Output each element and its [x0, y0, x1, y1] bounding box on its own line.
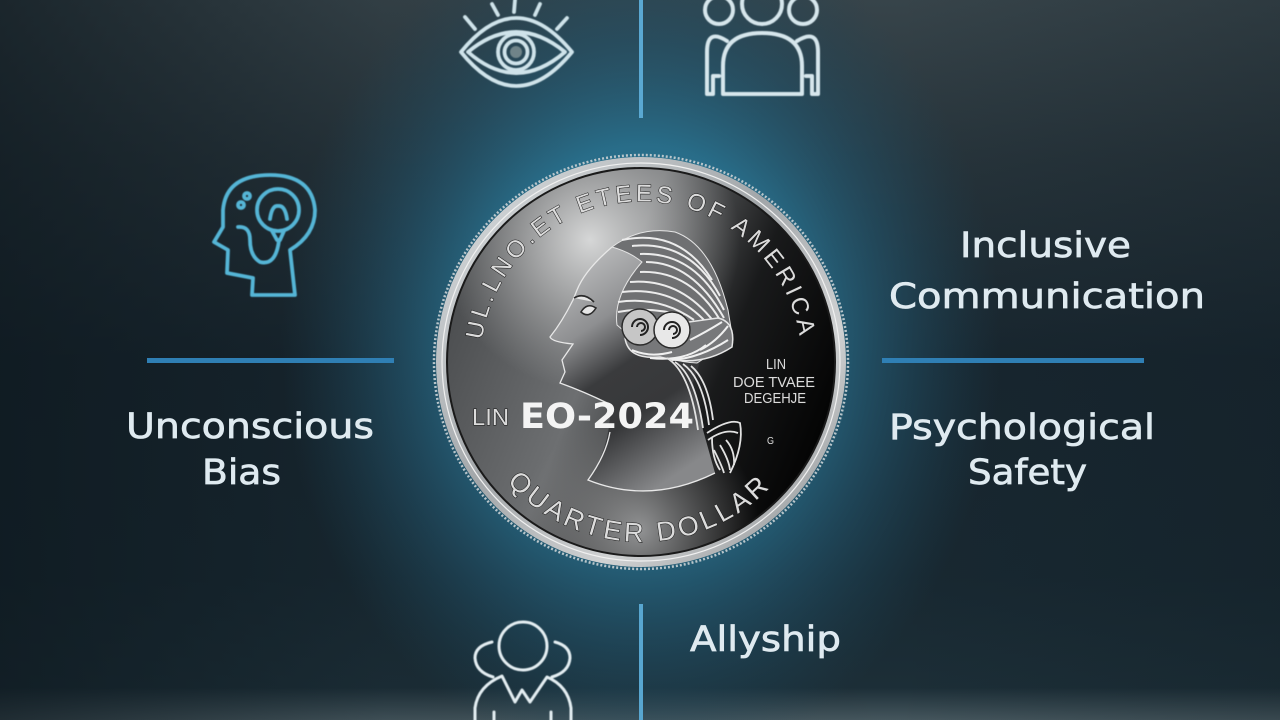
coin text: small motto: [733, 356, 815, 447]
label: Unconscious Bias: Unconscious: [126, 407, 374, 447]
coin rim: [436, 157, 846, 567]
coin legend bottom: QUARTER DOLLAR: [510, 472, 770, 543]
coin text: small motto: G: [767, 436, 774, 447]
coin text: small motto: DOE TVAEE: [733, 374, 815, 391]
portrait: head and bust: [550, 240, 720, 491]
portrait: face outline: [550, 247, 715, 491]
label: Unconscious Bias: Bias: [202, 453, 281, 493]
coin date: EO-2024: [520, 397, 694, 437]
coin small LIN: LIN: [472, 404, 509, 430]
icon: eye with lashes: [461, 0, 572, 86]
label: Inclusive Communication: Communication: [889, 277, 1205, 317]
coin: [432, 154, 850, 570]
coin reeded edge: [434, 155, 848, 569]
divider: right horizontal line: [882, 358, 1144, 363]
icon: head with lightbulb: [214, 175, 315, 295]
portrait: eye and brow: [574, 296, 596, 315]
label: Unconscious Bias: [126, 407, 374, 493]
label: Psychological Safety: Psychological: [889, 408, 1155, 448]
label: Inclusive Communication: [889, 226, 1205, 317]
portrait: curls: [622, 309, 733, 361]
coin face: [447, 168, 835, 556]
coin text: small motto: LIN: [766, 356, 786, 373]
portrait: hair: [612, 231, 733, 363]
portrait: queue and bow: [667, 358, 741, 473]
label: Psychological Safety: [889, 408, 1155, 493]
label: Inclusive Communication: Inclusive: [960, 226, 1131, 266]
divider: left horizontal line: [147, 358, 394, 363]
divider: top vertical line: [639, 0, 643, 118]
icon: group of three people: [705, 0, 818, 94]
label: Allyship: Allyship: [690, 620, 841, 660]
inner rim line: [442, 163, 840, 561]
label: Psychological Safety: Safety: [968, 453, 1087, 493]
divider: bottom vertical line: [639, 604, 643, 720]
coin text: small motto: DEGEHJE: [744, 390, 806, 407]
icon: person with allies: [475, 622, 571, 720]
coin legend top: UL.LNO.ET ETEES OF AMERICA: [465, 184, 814, 338]
